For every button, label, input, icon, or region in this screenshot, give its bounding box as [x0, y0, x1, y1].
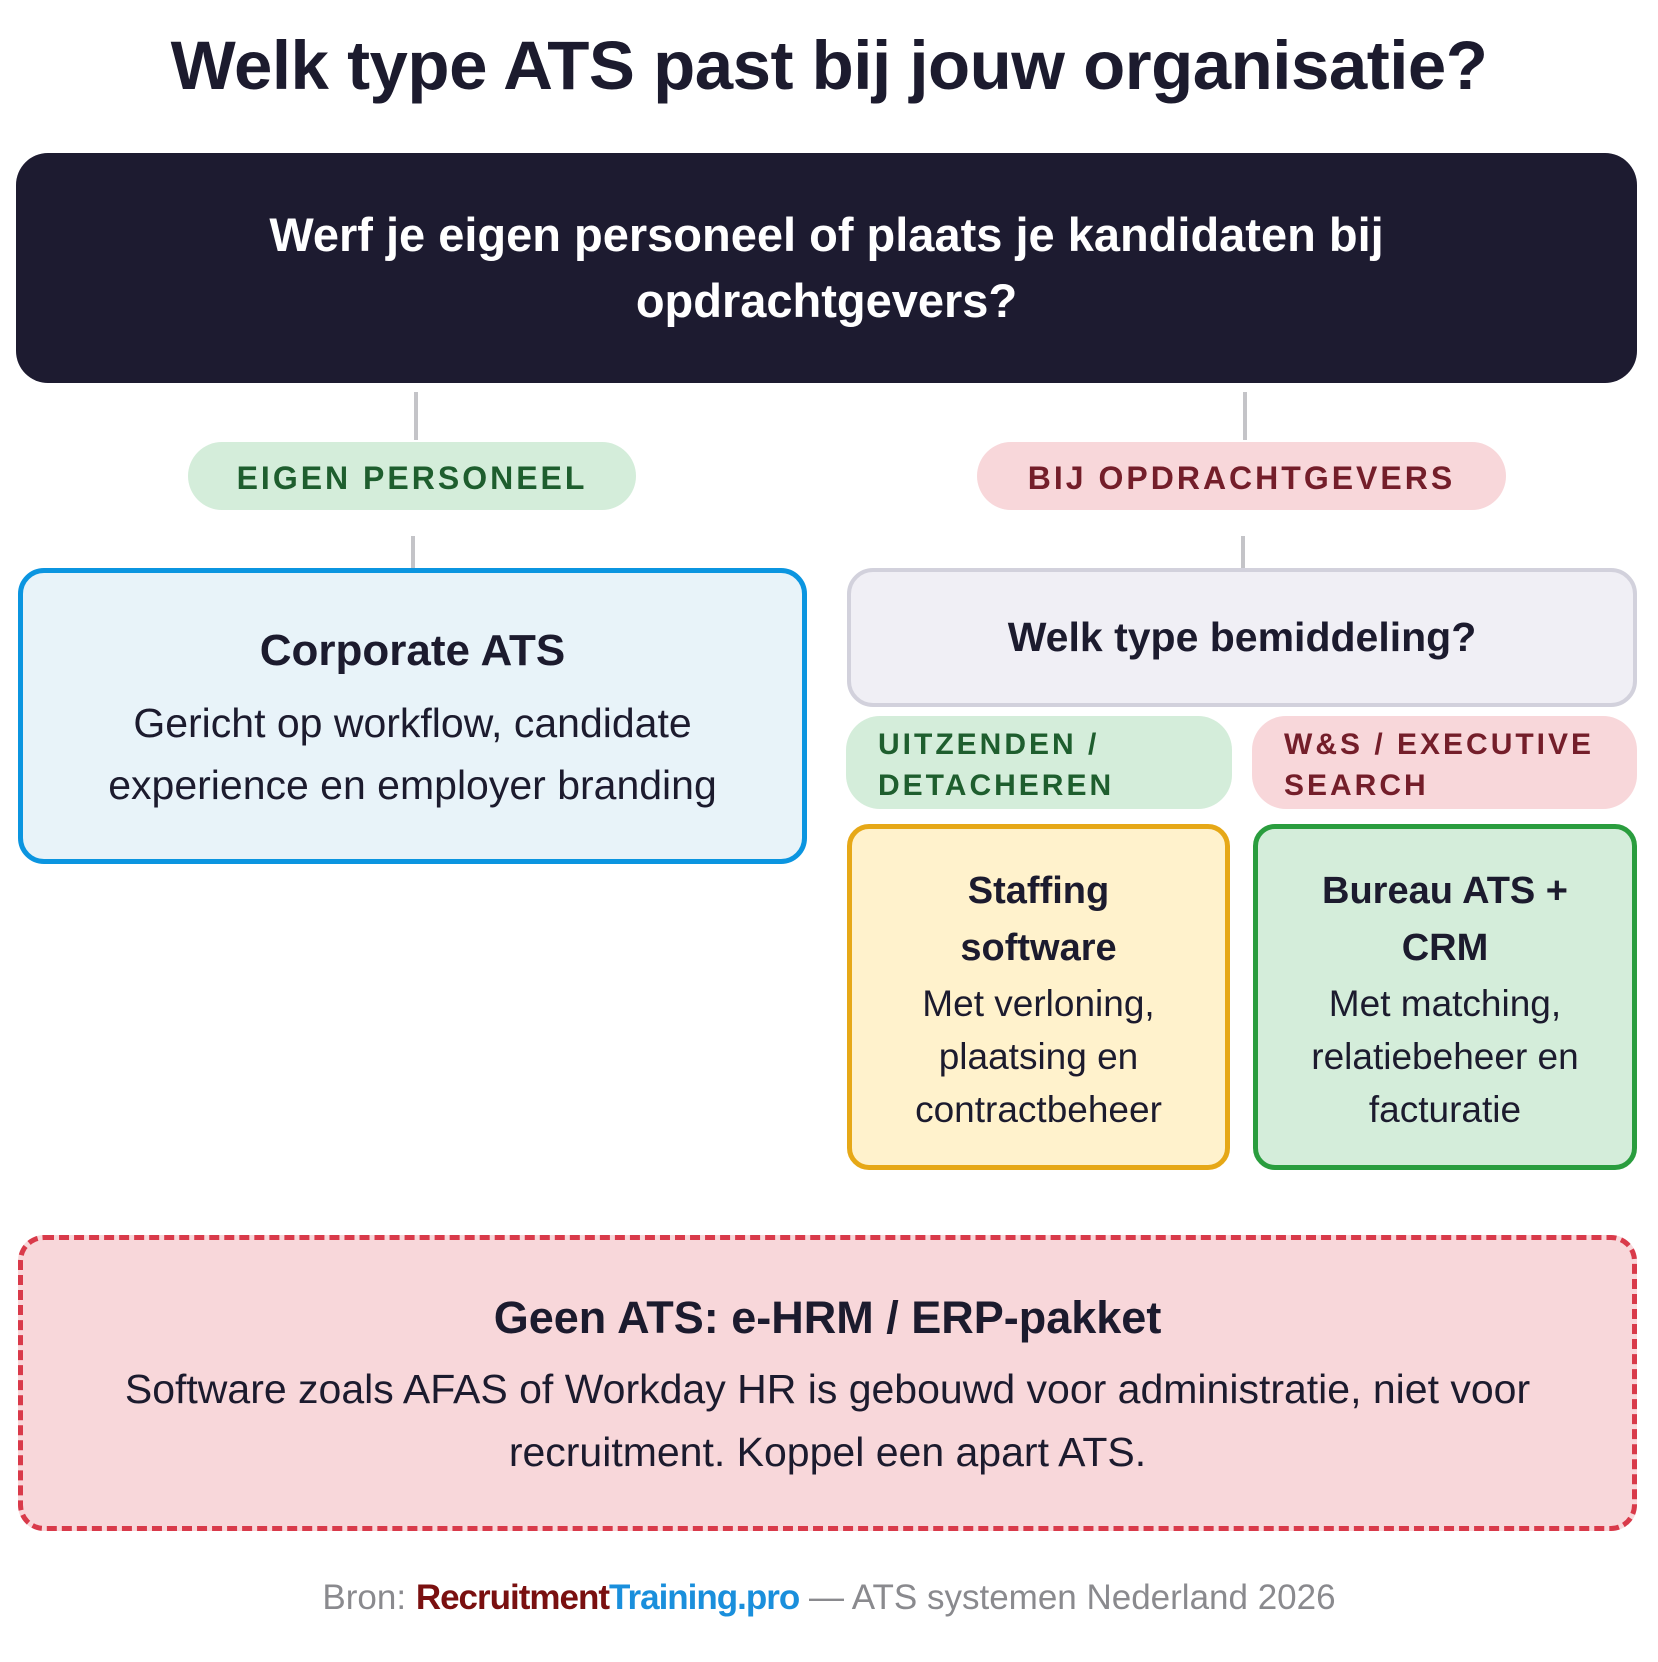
- text: Met matching,: [1329, 982, 1561, 1024]
- panel: welk type bemiddeling: [847, 568, 1637, 707]
- text: Software zoals AFAS of Workday HR is gebouwd voor administratie, niet voor: [125, 1366, 1530, 1412]
- heading: CRM: [1402, 926, 1488, 968]
- pill: uitzenden: DETACHEREN: [878, 769, 1114, 802]
- pill: bij opdrachtgevers: BIJ OPDRACHTGEVERS: [1028, 460, 1455, 496]
- panel: staffing software: [847, 824, 1230, 1170]
- heading: Bureau ATS +: [1322, 870, 1568, 912]
- text: relatiebeheer en: [1311, 1036, 1579, 1076]
- panel: bureau ATS: [1253, 824, 1637, 1170]
- question box: [16, 153, 1637, 383]
- connector right 2: [1241, 536, 1245, 568]
- text: contractbeheer: [915, 1088, 1162, 1130]
- heading: Geen ATS: e-HRM / ERP-pakket: [494, 1292, 1161, 1343]
- heading: Corporate ATS: [260, 626, 565, 675]
- text: recruitment. Koppel een apart ATS.: [509, 1429, 1146, 1475]
- text: facturatie: [1369, 1088, 1521, 1130]
- text: [915, 982, 1162, 1130]
- text: Gericht op workflow, candidate: [133, 700, 692, 746]
- text: [125, 1366, 1530, 1475]
- connector left 2: [411, 536, 415, 568]
- text: [1311, 982, 1579, 1130]
- panel: corporate ATS: [18, 568, 807, 864]
- footer source: Bron: RecruitmentTraining.pro — ATS systemen Nederland 2026: [322, 1578, 1336, 1617]
- question box: opdrachtgevers?: [636, 274, 1017, 327]
- heading: [960, 870, 1117, 968]
- text: experience en employer branding: [108, 762, 717, 808]
- text: Met verloning,: [922, 982, 1155, 1024]
- heading: [1322, 870, 1568, 968]
- connector right: [1243, 392, 1247, 440]
- pill: uitzenden: UITZENDEN /: [878, 728, 1099, 761]
- heading: Staffing: [968, 870, 1109, 912]
- text: [108, 700, 717, 808]
- panel: welk type bemiddeling: Welk type bemiddeling?: [1008, 614, 1476, 660]
- question box: Werf je eigen personeel of plaats je kandidaten bij: [269, 208, 1384, 261]
- pill: eigen personeel: [188, 442, 636, 510]
- pill: W&S: W&S / EXECUTIVE: [1284, 728, 1594, 761]
- heading: software: [960, 926, 1117, 968]
- pill: eigen personeel: EIGEN PERSONEEL: [237, 460, 587, 496]
- title: Welk type ATS past bij jouw organisatie?: [171, 27, 1487, 104]
- pill: W&S: [1252, 716, 1637, 809]
- text: plaatsing en: [939, 1036, 1138, 1076]
- connector left: [414, 392, 418, 440]
- pill: uitzenden: [846, 716, 1232, 809]
- pill: W&S: SEARCH: [1284, 769, 1429, 802]
- pill: bij opdrachtgevers: [977, 442, 1506, 510]
- panel: geen ATS: [18, 1235, 1637, 1531]
